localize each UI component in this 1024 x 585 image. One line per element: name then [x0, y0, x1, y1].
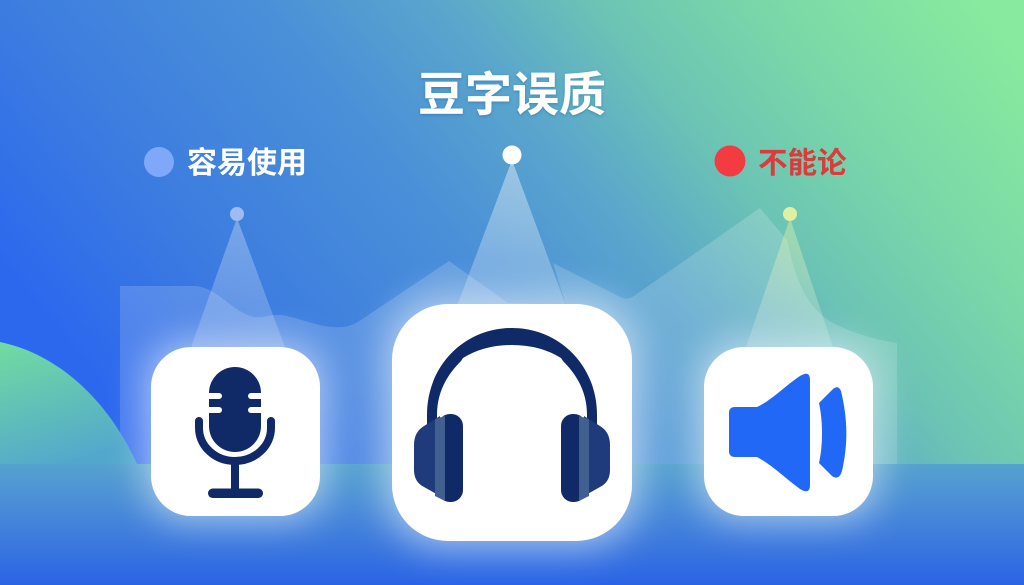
icon: speaker: [729, 374, 846, 491]
legend: easy to use: 容易使用: [187, 147, 307, 180]
legend: cannot discuss: 不能论: [758, 147, 847, 180]
icon: headphones: [414, 328, 610, 502]
light beam centre: [457, 146, 566, 306]
card: headphones: [392, 304, 632, 541]
light beam right: [745, 207, 834, 350]
icon: microphone: [199, 367, 271, 498]
green hill: [0, 342, 137, 470]
area chart silhouette: [120, 208, 897, 470]
light beam left: [190, 207, 286, 350]
title: 豆字误质: [418, 68, 606, 121]
legend: cannot discuss: [714, 146, 847, 180]
card glows: [145, 296, 879, 549]
card: speaker: [704, 347, 873, 516]
card: microphone: [151, 347, 320, 516]
bottom band: [0, 464, 1024, 585]
